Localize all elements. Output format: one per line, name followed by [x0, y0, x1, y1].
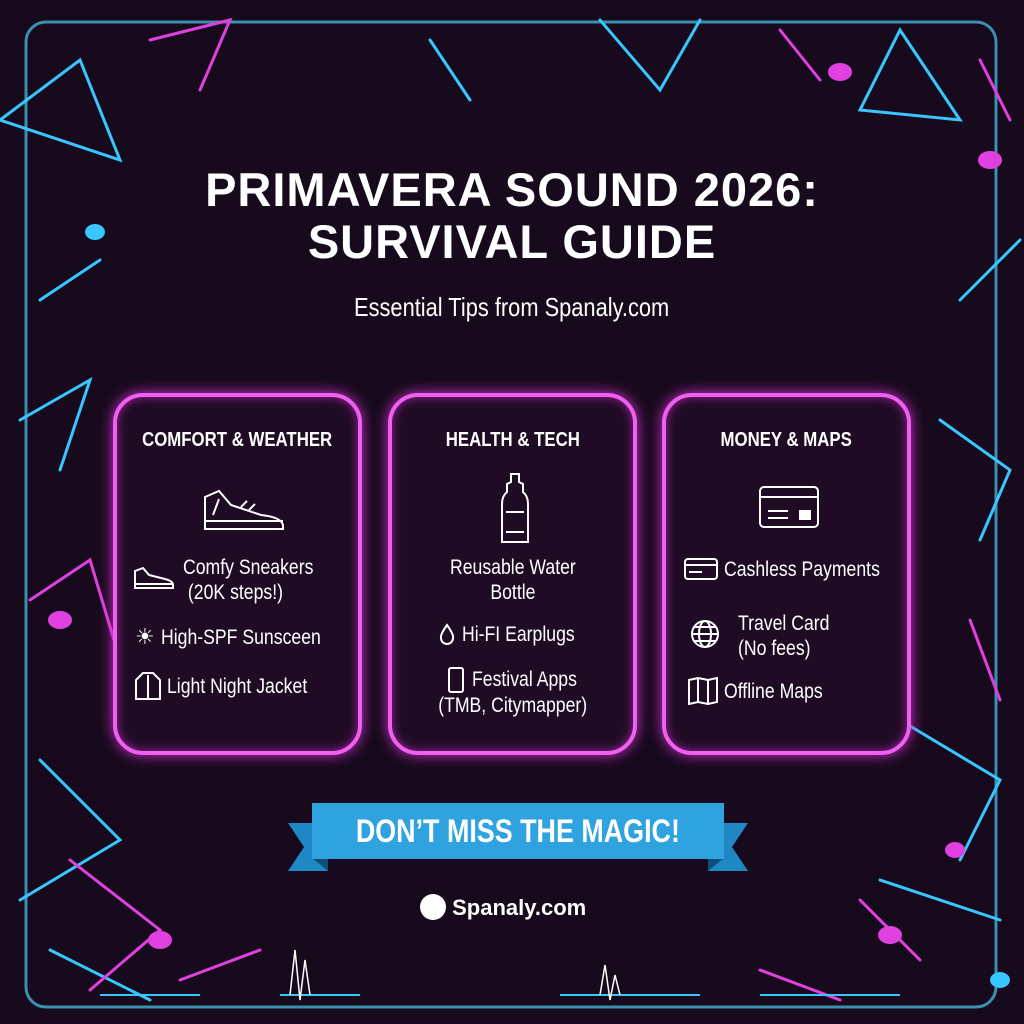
title: SURVIVAL GUIDE	[308, 215, 716, 268]
item: sneakers: Comfy Sneakers	[183, 556, 313, 579]
icon: card	[759, 486, 819, 528]
banner text: DON’T MISS THE MAGIC!	[356, 813, 680, 849]
item: water bottle: Reusable Water	[450, 556, 575, 579]
item: cashless: Cashless Payments	[724, 558, 880, 581]
item: earplugs: Hi-FI Earplugs	[462, 623, 575, 646]
logo: Spanaly.com	[452, 895, 586, 920]
item: sneakers	[134, 556, 313, 604]
item: jacket	[135, 672, 308, 700]
banner ribbon	[288, 803, 748, 871]
title	[205, 163, 819, 268]
item: jacket: Light Night Jacket	[167, 675, 307, 698]
panel: money & maps	[662, 393, 911, 755]
item: travel card	[691, 612, 829, 660]
item: offline maps	[688, 677, 823, 705]
item: offline maps: Offline Maps	[724, 680, 823, 703]
item: water bottle: Bottle	[490, 581, 535, 604]
panel: comfort & weather	[113, 393, 362, 755]
panel: comfort & weather: COMFORT & WEATHER	[142, 429, 333, 451]
item: travel card: (No fees)	[738, 637, 811, 660]
item: sneakers: (20K steps!)	[188, 581, 283, 604]
icon: bottle	[501, 473, 529, 543]
icon: sneaker	[204, 490, 284, 530]
item: sunscreen: ☀	[135, 624, 155, 649]
item: apps	[438, 667, 587, 717]
subtitle: Essential Tips from Spanaly.com	[354, 292, 670, 322]
panel: health & tech: HEALTH & TECH	[445, 429, 580, 451]
item: travel card: Travel Card	[738, 612, 829, 635]
item: apps: Festival Apps	[472, 668, 577, 691]
panel: money & maps: MONEY & MAPS	[721, 429, 852, 451]
item: sunscreen: High-SPF Sunsceen	[161, 626, 320, 649]
item: apps: (TMB, Citymapper)	[438, 694, 587, 717]
item: water bottle	[450, 556, 576, 604]
title: PRIMAVERA SOUND 2026:	[205, 163, 819, 216]
panel: health & tech	[388, 393, 637, 755]
